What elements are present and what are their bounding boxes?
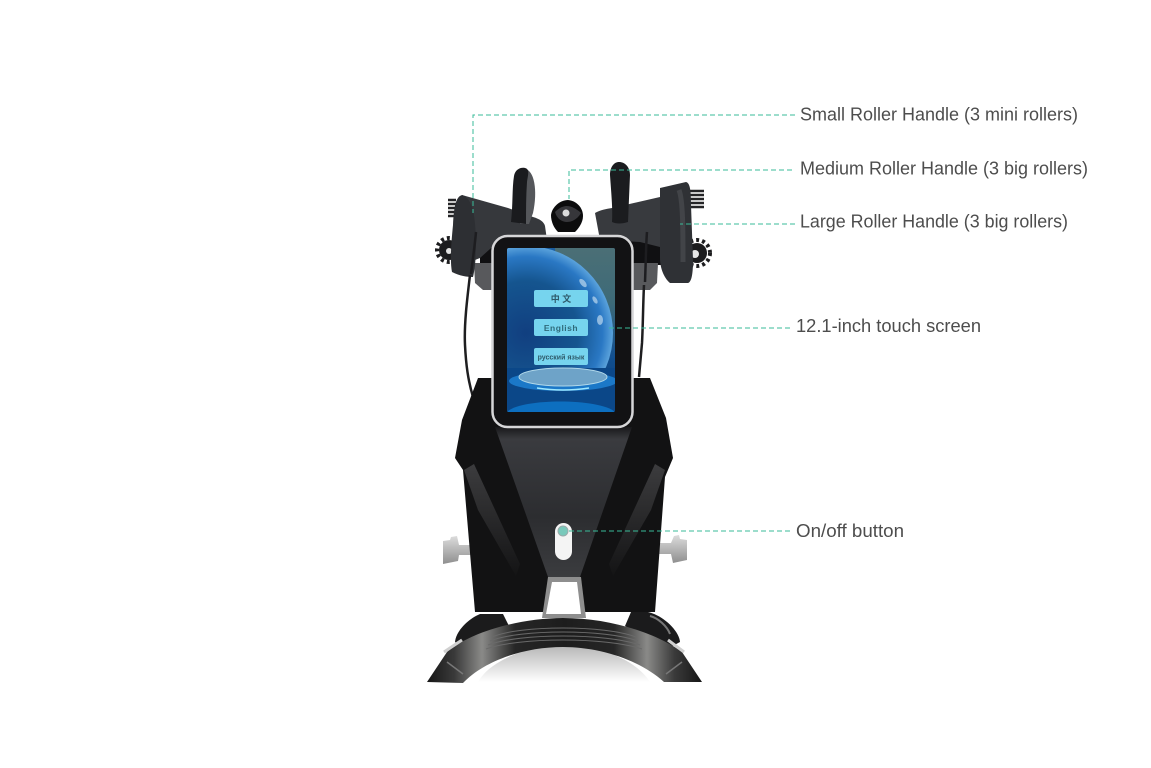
central V panel bbox=[495, 427, 632, 577]
back feet bbox=[455, 612, 680, 650]
device bbox=[427, 162, 710, 683]
body side highlights bbox=[464, 464, 665, 576]
label: on/off button: On/off button bbox=[796, 521, 904, 541]
small roller handle head bbox=[551, 200, 583, 232]
label: medium roller handle: Medium Roller Handle (3 big rollers) bbox=[800, 158, 1088, 178]
touch screen bbox=[491, 234, 634, 428]
planet clouds bbox=[578, 278, 603, 325]
label: small roller handle: Small Roller Handle (3 mini rollers) bbox=[800, 104, 1078, 124]
language button: Chinese: 中 文 bbox=[551, 293, 571, 304]
language button: Russian bbox=[534, 348, 588, 365]
cables bbox=[465, 275, 644, 397]
right large roller handle bbox=[595, 162, 710, 290]
right gear bbox=[684, 240, 710, 266]
on/off button bbox=[555, 523, 572, 560]
display bbox=[507, 248, 615, 412]
side grips bbox=[443, 535, 687, 564]
language button: English: English bbox=[544, 323, 578, 333]
label: large roller handle: Large Roller Handle (3 big rollers) bbox=[800, 212, 1068, 232]
main body bbox=[455, 378, 673, 612]
arched base bbox=[427, 618, 702, 683]
lower white trapezoid bbox=[542, 577, 586, 618]
language button: Chinese bbox=[534, 290, 588, 307]
display platform bbox=[509, 368, 617, 391]
left gear bbox=[437, 238, 461, 262]
left large roller handle bbox=[437, 168, 547, 290]
label: touch screen: 12.1-inch touch screen bbox=[796, 316, 981, 336]
language button: Russian: русский язык bbox=[538, 354, 585, 362]
language button: English bbox=[534, 319, 588, 336]
leader lines bbox=[473, 115, 795, 531]
